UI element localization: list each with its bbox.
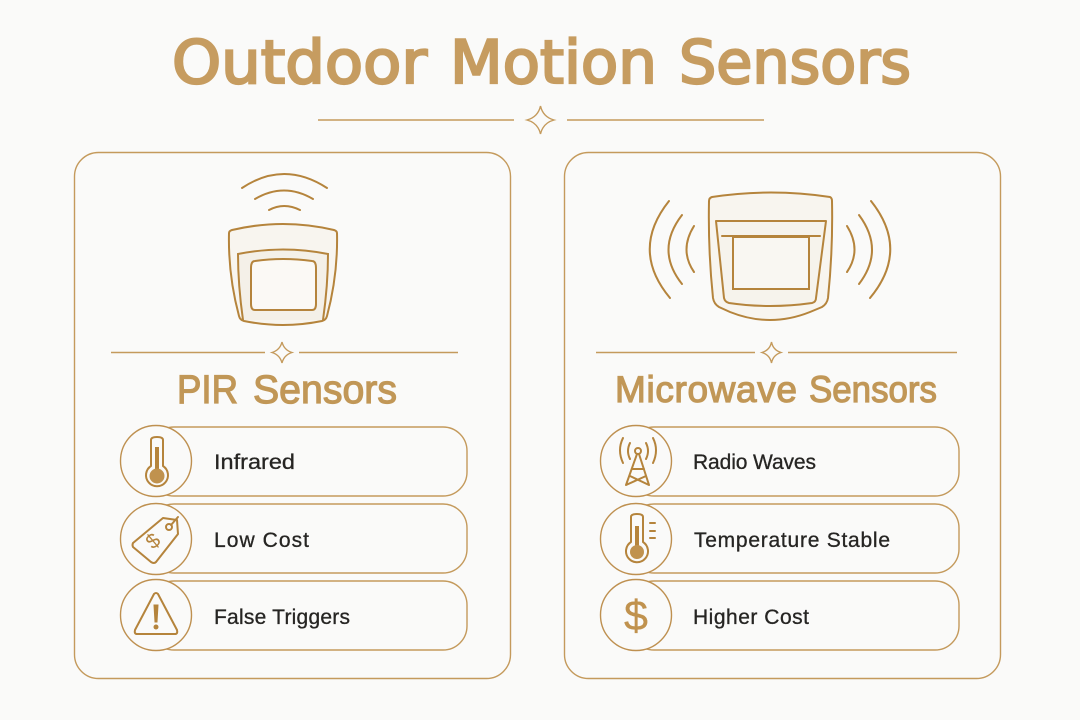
heading: PIR Sensors: PIR <box>177 368 238 412</box>
heading: Microwave Sensors: Sensors <box>809 369 937 410</box>
row: Temperature Stable <box>600 504 959 574</box>
icon: PIR sensor with signal arcs <box>229 174 337 325</box>
heading: Microwave Sensors: Microwave <box>615 369 797 410</box>
label: Radio Waves <box>693 451 816 474</box>
row: Low Cost <box>120 504 467 574</box>
panel: PIR sensors <box>74 152 510 678</box>
label: Higher Cost <box>693 606 809 629</box>
panel: Microwave sensors <box>564 152 1000 678</box>
icon: warning triangle <box>135 593 177 634</box>
heading: Microwave Sensors <box>615 369 937 410</box>
icon: dollar sign: $ <box>624 592 648 640</box>
title: Outdoor <box>172 28 427 98</box>
icon: microwave sensor with side waves <box>650 192 890 320</box>
icon: thermometer with scale <box>626 514 655 562</box>
icon: price tag: $ <box>141 529 165 554</box>
row: Radio Waves <box>600 426 959 496</box>
divider with sparkle <box>596 342 957 363</box>
icon: thermometer <box>146 437 168 486</box>
label: False Triggers <box>214 606 350 629</box>
label: Infrared <box>214 451 295 474</box>
icon: radio tower <box>620 438 656 485</box>
title: Sensors <box>679 28 911 98</box>
title: Motion <box>450 28 657 98</box>
row: Infrared <box>120 426 467 496</box>
heading: PIR Sensors: Sensors <box>253 368 397 412</box>
label: Temperature Stable <box>694 529 890 552</box>
title <box>172 28 911 98</box>
divider with sparkle <box>111 342 458 363</box>
row: Higher Cost <box>600 580 959 650</box>
heading: PIR Sensors <box>177 368 397 412</box>
title divider with sparkle <box>318 106 764 134</box>
label: Low Cost <box>214 529 309 552</box>
icon: price tag <box>132 517 178 563</box>
row: False Triggers <box>120 580 467 650</box>
